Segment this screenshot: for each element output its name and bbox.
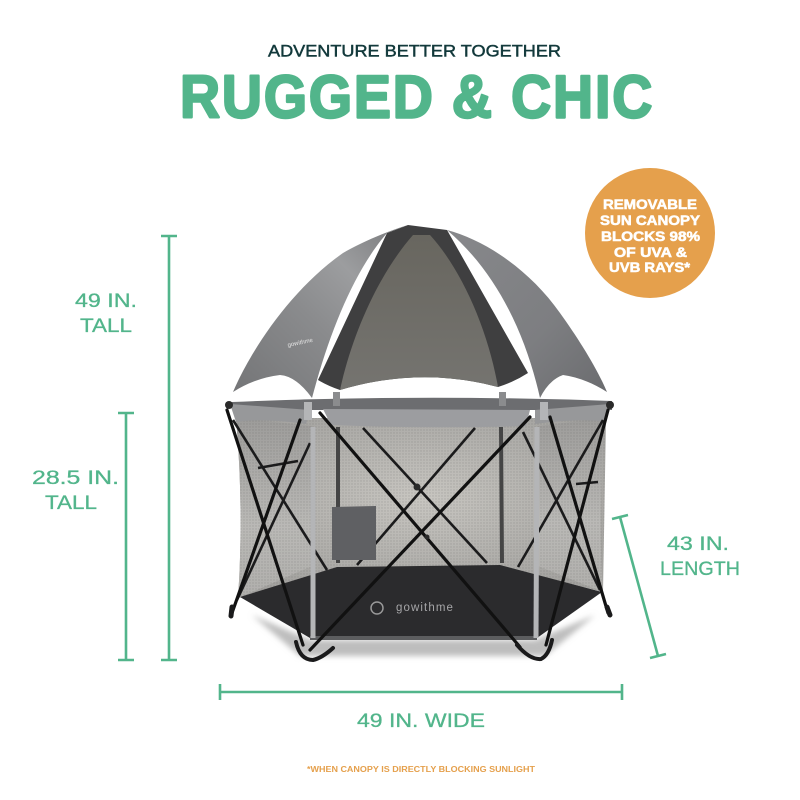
floor: gowithme [396,602,454,614]
title: RUGGED & CHIC [180,65,654,131]
canopy left panel [233,225,408,398]
label: 49 in. tall: 49 IN. [75,290,137,312]
feet [231,607,610,660]
side mesh shading right [538,418,606,592]
side rim right [535,404,610,424]
canopy logo: gowithme [287,338,314,349]
badge: sun canopy callout: REMOVABLE [603,197,697,212]
back rim [232,398,612,410]
dimension: 49 in. wide line [220,684,622,700]
canopy [233,225,607,420]
label: 49 in. tall: TALL [80,315,132,337]
label: 49 in. wide: 49 IN. WIDE [357,710,485,732]
label: 43 in. length: 43 IN. [667,533,729,555]
back frame tubes [233,420,603,600]
dimension: 28.5 in. tall line [118,413,134,660]
back mesh walls [236,418,606,598]
light vertical straps [313,427,537,638]
canopy back dark panel [318,225,528,390]
dimension: 49 in. tall line [161,236,177,660]
playard product photo [225,225,614,660]
label: 43 in. length: LENGTH [660,558,740,580]
dimension: 43 in. length line [612,515,666,658]
mesh texture [236,418,606,598]
badge: sun canopy callout: SUN CANOPY [600,213,700,228]
badge: sun canopy callout [585,168,715,298]
storage pocket [332,506,376,560]
canopy right panel [447,230,607,398]
badge: sun canopy callout: OF UVA & [614,245,687,260]
side mesh shading left [236,418,312,598]
floor [240,565,602,640]
label: 49 in. tall [75,290,137,337]
floor shadow [252,615,595,656]
label: 28.5 in. tall: TALL [45,492,97,514]
side rim left [230,404,310,424]
front frame tubes [227,410,608,650]
dark vertical back posts [338,427,502,563]
label: 43 in. length [660,533,740,580]
label: 28.5 in. tall: 28.5 IN. [32,467,119,489]
badge: sun canopy callout: UVB RAYS* [609,260,691,275]
frame joints [225,401,614,540]
canopy clips [304,392,548,420]
subtitle: ADVENTURE BETTER TOGETHER [268,42,561,60]
canopy inner panel [340,235,498,390]
badge: sun canopy callout: BLOCKS 98% [601,229,700,244]
label: 28.5 in. tall [32,467,119,514]
front rim band [323,409,530,427]
footnote: *WHEN CANOPY IS DIRECTLY BLOCKING SUNLIGHT [307,765,535,774]
